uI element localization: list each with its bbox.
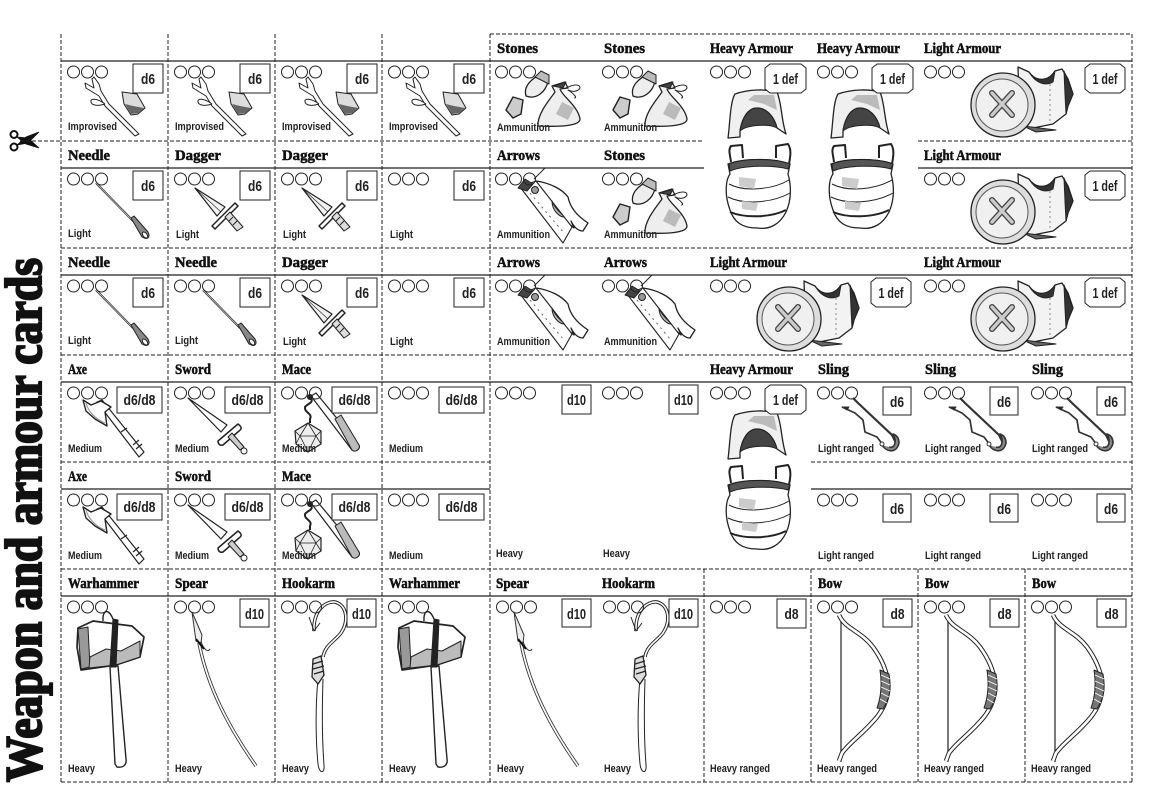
defence badge: 1 def <box>773 71 799 88</box>
damage die: d10 <box>567 606 586 623</box>
damage die: d10 <box>674 606 693 623</box>
icon: warhammer <box>398 612 465 767</box>
weapon class: Improvised <box>175 121 224 133</box>
weapon class: Light <box>390 229 413 241</box>
weapon class: Medium <box>175 550 209 562</box>
damage die <box>562 385 591 414</box>
damage die: d6 <box>248 178 262 195</box>
damage die <box>669 385 698 414</box>
defence badge <box>872 64 913 93</box>
icon: arrow quiver <box>518 275 588 350</box>
defence badge: 1 def <box>880 71 906 88</box>
damage die: d6 <box>890 394 904 411</box>
usage circles <box>282 387 322 399</box>
damage die: d6/d8 <box>338 392 370 409</box>
weapon class: Heavy <box>282 763 310 775</box>
usage circles <box>710 66 750 78</box>
weapon class: Heavy ranged <box>710 763 770 775</box>
icon: button and vest <box>971 174 1073 244</box>
card: light armour 1 <box>924 41 1125 137</box>
weapon class: Improvised <box>282 121 331 133</box>
card title: Sling <box>818 362 850 378</box>
damage die <box>347 599 376 627</box>
weapon class: Light <box>283 336 306 348</box>
card title: Sling <box>925 362 957 378</box>
weapon class: Medium <box>389 443 423 455</box>
usage circles <box>710 280 750 292</box>
damage die <box>669 599 698 627</box>
card: stones 2 <box>602 41 687 134</box>
weapon class: Ammunition <box>604 122 657 134</box>
icon: dagger <box>195 188 243 231</box>
usage circles <box>496 280 536 292</box>
card title: Arrows <box>497 148 540 164</box>
card: heavy armour 2 <box>817 41 913 228</box>
usage circles <box>68 494 108 506</box>
damage die: d6/d8 <box>232 499 264 516</box>
defence badge <box>871 278 911 307</box>
card: needle 3 <box>174 255 270 347</box>
usage circles <box>388 387 428 399</box>
usage circles <box>174 280 214 292</box>
weapon class: Light ranged <box>1032 550 1088 562</box>
card: heavy armour 3 <box>710 362 806 549</box>
icon: helmet and breastplate <box>726 90 790 228</box>
usage circles <box>602 173 642 185</box>
card: light armour 3 <box>710 255 911 351</box>
usage circles <box>174 66 214 78</box>
usage circles <box>602 387 642 399</box>
card: light armour 4 <box>924 255 1125 351</box>
defence badge <box>1085 278 1125 307</box>
icon: arrow quiver <box>625 275 695 350</box>
card title: Heavy Armour <box>710 41 793 57</box>
icon: sword <box>188 398 247 454</box>
weapon class: Ammunition <box>604 229 657 241</box>
icon: stick and rock <box>299 77 359 136</box>
damage die <box>777 599 806 628</box>
usage circles <box>710 387 750 399</box>
icon: stones and bag <box>613 71 687 126</box>
usage circles <box>282 66 322 78</box>
weapon class: Heavy <box>604 763 632 775</box>
damage die: d6/d8 <box>446 499 478 516</box>
defence badge: 1 def <box>878 285 904 302</box>
card: arrows 1 <box>496 148 588 243</box>
icon: sling <box>842 398 899 451</box>
card title: Dagger <box>175 148 222 164</box>
card: dagger 3 <box>282 255 377 348</box>
card: dagger 1 <box>174 148 270 241</box>
damage die: d10 <box>674 392 693 409</box>
card: heavy armour 1 <box>710 41 806 228</box>
card: sword 1 <box>174 362 270 455</box>
weapon class: Light ranged <box>925 550 981 562</box>
usage circles <box>1032 494 1072 506</box>
card title: Light Armour <box>924 41 1001 57</box>
card: arrows 2 <box>496 255 588 350</box>
icon: button and vest <box>971 67 1073 137</box>
card: improvised 1 <box>68 64 163 136</box>
card: stones 1 <box>496 41 580 134</box>
card: needle 2 <box>68 255 163 347</box>
usage circles <box>496 173 536 185</box>
weapon class: Light <box>283 229 306 241</box>
usage circles <box>496 601 536 613</box>
weapon class: Heavy <box>603 548 631 560</box>
usage circles <box>68 387 108 399</box>
card title: Stones <box>604 41 645 57</box>
damage die: d6 <box>462 285 476 302</box>
card title: Sword <box>175 469 211 485</box>
icon: mace <box>295 393 359 452</box>
card: blank heavy 1 <box>496 385 591 560</box>
card title: Needle <box>68 148 111 164</box>
usage circles <box>604 601 644 613</box>
weapon class: Ammunition <box>497 122 550 134</box>
card: improvised 4 <box>388 64 484 136</box>
card title: Bow <box>925 576 949 592</box>
icon: needle <box>203 290 256 346</box>
usage circles <box>818 494 858 506</box>
icon: button and vest <box>757 281 859 351</box>
card: bow 2 <box>924 576 1019 775</box>
defence badge <box>1085 64 1125 93</box>
card: blank light 2 <box>388 278 484 348</box>
icon: bow <box>1053 615 1104 762</box>
defence badge: 1 def <box>773 392 799 409</box>
damage die <box>990 599 1019 627</box>
icon: hook <box>631 602 668 772</box>
usage circles <box>68 66 108 78</box>
damage die: d6 <box>462 71 476 88</box>
usage circles <box>818 387 858 399</box>
usage circles <box>818 601 858 613</box>
icon: axe <box>83 400 144 457</box>
usage circles <box>388 494 428 506</box>
weapon class: Light ranged <box>818 550 874 562</box>
usage circles <box>924 66 964 78</box>
card: blank light 1 <box>388 171 484 241</box>
card: bow 1 <box>817 576 912 775</box>
damage die: d6 <box>355 71 369 88</box>
card title: Warhammer <box>389 576 460 592</box>
weapon class: Heavy ranged <box>924 763 984 775</box>
usage circles <box>388 601 428 613</box>
usage circles <box>924 280 964 292</box>
damage die: d6 <box>997 394 1011 411</box>
usage circles <box>174 387 214 399</box>
weapon class: Medium <box>389 550 423 562</box>
card: blank light ranged 3 <box>1032 494 1125 562</box>
damage die: d6/d8 <box>124 499 156 516</box>
damage die: d6 <box>248 71 262 88</box>
weapon class: Light ranged <box>1032 443 1088 455</box>
damage die: d6 <box>141 285 155 302</box>
icon: stones and bag <box>613 178 687 233</box>
card: mace 2 <box>282 469 377 562</box>
card: blank medium 1 <box>388 387 484 455</box>
card: blank heavy 2 <box>602 385 698 560</box>
icon: needle <box>96 290 149 346</box>
damage die <box>883 599 912 627</box>
card: sling 3 <box>1032 362 1125 455</box>
icon: bow <box>839 615 890 762</box>
damage die: d10 <box>245 606 264 623</box>
icon: sword <box>188 505 247 561</box>
card title: Axe <box>68 469 87 485</box>
card title: Needle <box>68 255 111 271</box>
card: light armour 2 <box>924 148 1125 244</box>
icon: sling <box>1056 398 1113 451</box>
usage circles <box>924 494 964 506</box>
card title: Heavy Armour <box>817 41 900 57</box>
weapon class: Heavy <box>497 763 525 775</box>
icon: arrow quiver <box>518 168 588 243</box>
icon: stick and rock <box>85 77 145 136</box>
usage circles <box>602 280 642 292</box>
card title: Sling <box>1032 362 1064 378</box>
damage die <box>562 599 591 627</box>
weapon class: Medium <box>175 443 209 455</box>
usage circles <box>496 387 536 399</box>
icon: stick and rock <box>192 77 252 136</box>
damage die: d6 <box>141 178 155 195</box>
usage circles <box>68 601 108 613</box>
weapon class: Light <box>68 228 91 240</box>
card: spear 1 <box>174 576 269 775</box>
usage circles <box>710 601 750 613</box>
weapon class: Medium <box>68 443 102 455</box>
damage die: d6/d8 <box>232 392 264 409</box>
weapon class: Heavy <box>496 548 524 560</box>
card: improvised 3 <box>282 64 377 136</box>
usage circles <box>388 280 428 292</box>
card: warhammer 1 <box>68 576 144 775</box>
damage die: d6 <box>1104 501 1118 518</box>
usage circles <box>68 173 108 185</box>
defence badge: 1 def <box>1092 285 1118 302</box>
damage die: d8 <box>890 606 904 623</box>
usage circles <box>924 601 964 613</box>
card title: Mace <box>282 469 311 485</box>
card title: Sword <box>175 362 211 378</box>
usage circles <box>388 66 428 78</box>
card: sword 2 <box>174 469 270 562</box>
defence badge: 1 def <box>1092 71 1118 88</box>
card: improvised 2 <box>174 64 270 136</box>
damage die: d10 <box>567 392 586 409</box>
card title: Heavy Armour <box>710 362 793 378</box>
defence badge <box>765 64 806 93</box>
usage circles <box>1032 387 1072 399</box>
card title: Arrows <box>497 255 540 271</box>
weapon class: Heavy <box>389 763 417 775</box>
usage circles <box>174 601 214 613</box>
weapon class: Ammunition <box>497 229 550 241</box>
usage circles <box>174 173 214 185</box>
usage circles <box>1032 601 1072 613</box>
usage circles <box>818 66 858 78</box>
card title: Needle <box>175 255 218 271</box>
weapon class: Medium <box>68 550 102 562</box>
icon: dagger <box>302 188 350 231</box>
damage die <box>1097 599 1126 627</box>
damage die: d6 <box>462 178 476 195</box>
card title: Light Armour <box>924 148 1001 164</box>
card title: Arrows <box>604 255 647 271</box>
icon: button and vest <box>971 281 1073 351</box>
usage circles <box>602 66 642 78</box>
weapon class: Heavy ranged <box>817 763 877 775</box>
card: warhammer 2 <box>388 576 465 775</box>
icon: sling <box>949 398 1006 451</box>
weapon class: Medium <box>282 550 316 562</box>
icon: scissors <box>10 131 39 150</box>
card title: Hookarm <box>282 576 335 592</box>
card title: Bow <box>1032 576 1056 592</box>
damage die: d6 <box>890 501 904 518</box>
damage die: d6 <box>997 501 1011 518</box>
card title: Stones <box>497 41 538 57</box>
card: hookarm 2 <box>602 576 698 775</box>
card: mace 1 <box>282 362 377 455</box>
weapon class: Improvised <box>389 121 438 133</box>
card title: Warhammer <box>68 576 139 592</box>
weapon class: Heavy <box>175 763 203 775</box>
icon: stick and rock <box>406 77 466 136</box>
icon: needle <box>96 183 149 239</box>
icon: bow <box>946 615 997 762</box>
damage die: d8 <box>784 606 798 623</box>
card: axe 2 <box>68 469 162 564</box>
card: sling 2 <box>924 362 1018 455</box>
weapon class: Improvised <box>68 121 117 133</box>
card title: Dagger <box>282 255 329 271</box>
card title: Bow <box>818 576 842 592</box>
card: blank heavy ranged <box>710 599 806 775</box>
damage die: d8 <box>998 606 1012 623</box>
weapon class: Light <box>390 336 413 348</box>
card title: Light Armour <box>710 255 787 271</box>
weapon class: Ammunition <box>604 336 657 348</box>
card title: Spear <box>496 576 530 592</box>
weapon class: Heavy ranged <box>1031 763 1091 775</box>
damage die: d6/d8 <box>338 499 370 516</box>
card title: Light Armour <box>924 255 1001 271</box>
card: axe 1 <box>68 362 162 457</box>
usage circles <box>282 494 322 506</box>
usage circles <box>282 601 322 613</box>
card title: Stones <box>604 148 645 164</box>
icon: mace <box>295 500 359 559</box>
defence badge <box>1085 171 1125 200</box>
usage circles <box>68 280 108 292</box>
icon: helmet and breastplate <box>726 411 790 549</box>
card title: Hookarm <box>602 576 655 592</box>
damage die: d6 <box>355 178 369 195</box>
weapon class: Ammunition <box>497 336 550 348</box>
defence badge <box>765 385 806 414</box>
icon: hook <box>309 602 346 772</box>
card: sling 1 <box>818 362 911 455</box>
card: stones 3 <box>602 148 687 241</box>
card: blank light ranged 2 <box>924 494 1018 562</box>
damage die <box>240 599 269 627</box>
card: spear 2 <box>496 576 591 775</box>
icon: stones and bag <box>506 71 580 126</box>
card: needle <box>68 148 163 240</box>
card: blank light ranged 1 <box>818 494 911 562</box>
damage die: d6/d8 <box>446 392 478 409</box>
card title: Spear <box>175 576 209 592</box>
weapon class: Light <box>175 335 198 347</box>
weapon class: Medium <box>282 443 316 455</box>
weapon class: Light <box>68 335 91 347</box>
weapon class: Light <box>176 229 199 241</box>
usage circles <box>282 280 322 292</box>
icon: axe <box>83 507 144 564</box>
damage die: d10 <box>352 606 371 623</box>
usage circles <box>174 494 214 506</box>
card title: Dagger <box>282 148 329 164</box>
damage die: d6 <box>1104 394 1118 411</box>
card title: Mace <box>282 362 311 378</box>
card: hookarm 1 <box>282 576 376 775</box>
icon: spear <box>514 612 578 766</box>
icon: helmet and breastplate <box>829 90 893 228</box>
icon: spear <box>192 612 256 766</box>
defence badge: 1 def <box>1092 178 1118 195</box>
weapon class: Light ranged <box>818 443 874 455</box>
usage circles <box>924 173 964 185</box>
usage circles <box>924 387 964 399</box>
usage circles <box>388 173 428 185</box>
damage die: d6 <box>355 285 369 302</box>
card: dagger 2 <box>282 148 377 241</box>
weapon class: Heavy <box>68 763 96 775</box>
icon: warhammer <box>77 612 144 767</box>
card: blank medium 2 <box>388 494 484 562</box>
damage die: d6 <box>248 285 262 302</box>
card: bow 3 <box>1031 576 1126 775</box>
card: arrows 3 <box>602 255 695 350</box>
weapon class: Light ranged <box>925 443 981 455</box>
damage die: d8 <box>1104 606 1118 623</box>
usage circles <box>496 66 536 78</box>
card title: Axe <box>68 362 87 378</box>
damage die: d6/d8 <box>124 392 156 409</box>
icon: dagger <box>302 295 350 338</box>
usage circles <box>282 173 322 185</box>
damage die: d6 <box>141 71 155 88</box>
